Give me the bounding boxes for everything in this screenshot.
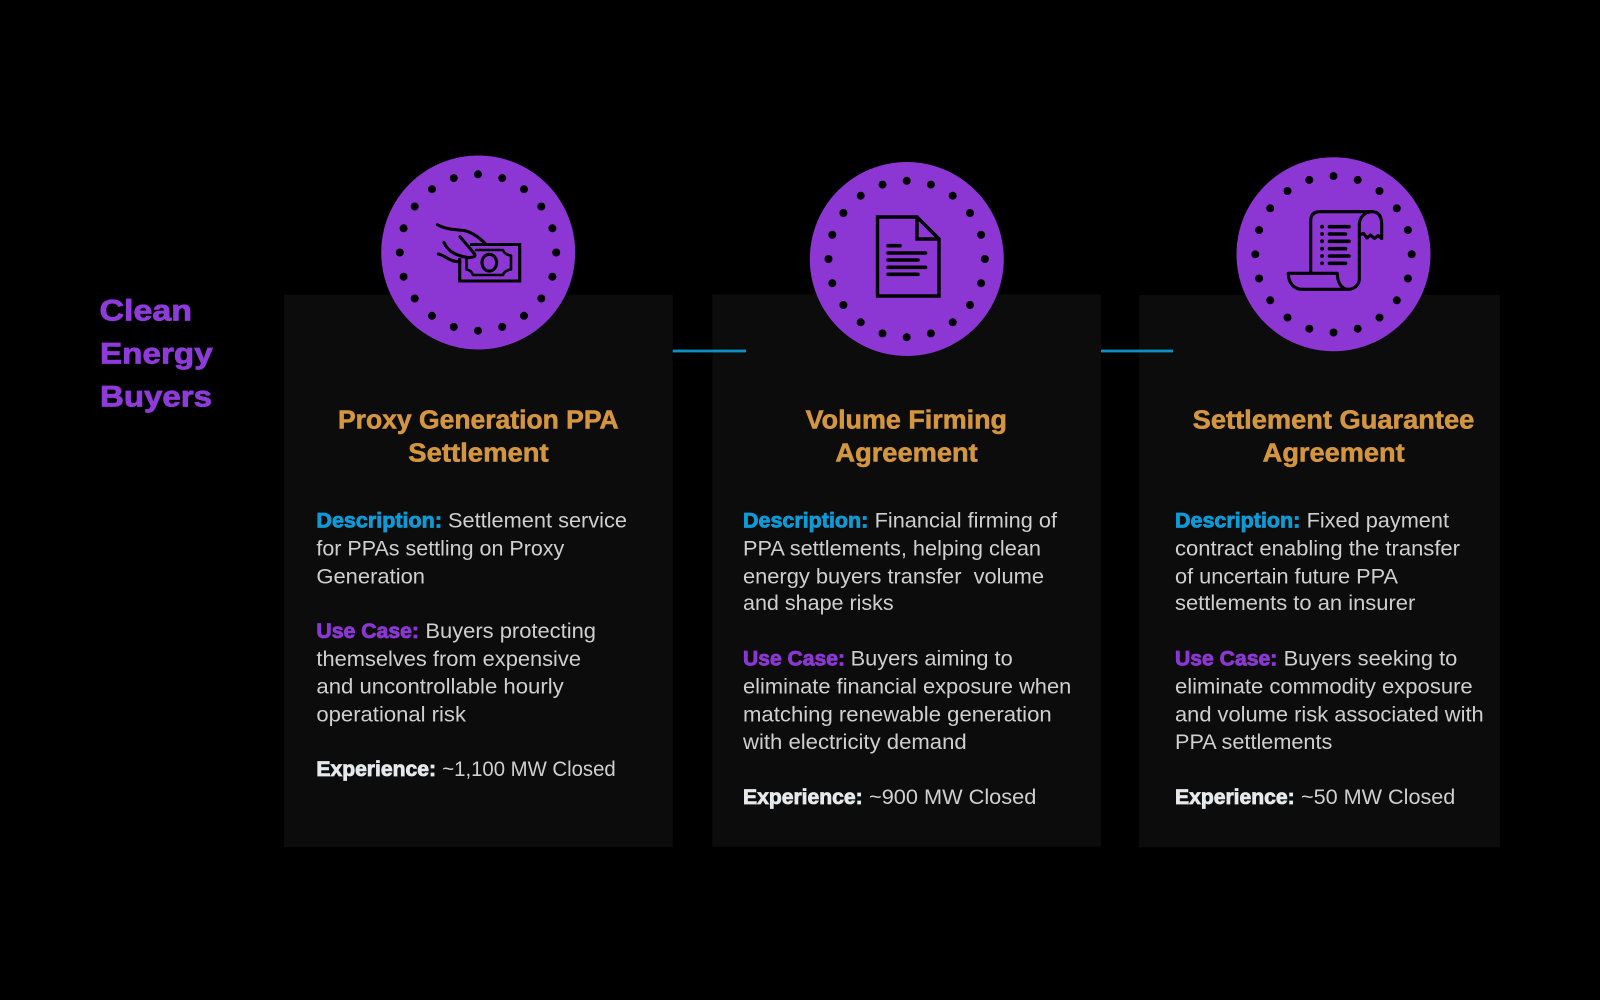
text block: description bbox=[743, 509, 1057, 615]
text block: description: Settlement service bbox=[448, 509, 627, 533]
heading: Volume Firming Agreement bbox=[806, 406, 1007, 468]
text block: experience: ~900 MW Closed bbox=[869, 785, 1036, 809]
text block: description: energy buyers transfer volume bbox=[743, 564, 1044, 588]
text block: description: Financial firming of bbox=[875, 509, 1057, 533]
text block: description bbox=[316, 509, 627, 588]
text block: experience: ~50 MW Closed bbox=[1301, 785, 1455, 809]
heading: Settlement Guarantee Agreement: Settlement Guarantee bbox=[1193, 406, 1474, 434]
text block: use case: eliminate financial exposure when bbox=[743, 675, 1071, 699]
heading: Volume Firming Agreement: Volume Firming bbox=[806, 406, 1007, 434]
panel: Settlement Guarantee Agreement bbox=[1139, 295, 1500, 847]
text block: experience: Experience: bbox=[1175, 785, 1295, 809]
panel: Volume Firming Agreement bbox=[712, 294, 1101, 847]
text block: description: settlements to an insurer bbox=[1175, 591, 1415, 615]
heading: Volume Firming Agreement: Agreement bbox=[835, 440, 978, 468]
text block: use case bbox=[316, 619, 596, 727]
text block: experience bbox=[743, 785, 1036, 809]
connector: panel 1 to panel 2 bbox=[673, 350, 746, 352]
text block: use case: Buyers protecting bbox=[425, 619, 596, 643]
text block: use case: themselves from expensive bbox=[316, 647, 581, 671]
icon: document bbox=[810, 162, 1004, 356]
connector: panel 2 to panel 3 bbox=[1101, 350, 1173, 352]
text block: use case: Buyers seeking to bbox=[1284, 647, 1457, 671]
text block: description: Fixed payment bbox=[1307, 509, 1449, 533]
heading: Proxy Generation PPA Settlement bbox=[338, 406, 619, 468]
text block: description: Description: bbox=[1175, 509, 1300, 533]
text block: use case: with electricity demand bbox=[742, 730, 967, 754]
text block: experience bbox=[316, 757, 616, 781]
text block: use case bbox=[742, 647, 1071, 754]
heading: Proxy Generation PPA Settlement: Settlement bbox=[408, 440, 549, 468]
text block: use case bbox=[1175, 647, 1484, 754]
text block: use case: and uncontrollable hourly bbox=[316, 675, 564, 699]
text block: description: PPA settlements, helping clean bbox=[743, 536, 1041, 560]
text block: experience: ~1,100 MW Closed bbox=[442, 757, 616, 781]
text block: description: of uncertain future PPA bbox=[1175, 564, 1399, 588]
icon: hand holding money bbox=[381, 156, 575, 350]
side heading: Clean Energy Buyers bbox=[100, 295, 213, 414]
heading: Settlement Guarantee Agreement: Agreement bbox=[1263, 440, 1405, 468]
text block: description: Description: bbox=[743, 509, 868, 533]
side heading: Clean Energy Buyers: Clean bbox=[100, 295, 192, 328]
text block: description: Description: bbox=[316, 509, 442, 533]
text block: use case: PPA settlements bbox=[1175, 730, 1332, 754]
text block: experience: Experience: bbox=[743, 785, 863, 809]
text block: use case: eliminate commodity exposure bbox=[1175, 675, 1473, 699]
heading: Settlement Guarantee Agreement bbox=[1193, 406, 1474, 468]
text block: description: for PPAs settling on Proxy bbox=[316, 536, 565, 560]
side heading: Clean Energy Buyers: Energy bbox=[100, 337, 213, 370]
icon: scroll receipt bbox=[1236, 157, 1430, 351]
text block: use case: and volume risk associated with bbox=[1175, 703, 1484, 727]
text block: use case: matching renewable generation bbox=[743, 703, 1052, 727]
text block: use case: Use Case: bbox=[743, 647, 845, 671]
text block: description: Generation bbox=[316, 564, 425, 588]
text block: description: and shape risks bbox=[743, 591, 894, 615]
text block: description: contract enabling the transfer bbox=[1175, 536, 1460, 560]
side heading: Clean Energy Buyers: Buyers bbox=[100, 381, 212, 414]
text block: use case: Buyers aiming to bbox=[851, 647, 1013, 671]
panel: Proxy Generation PPA Settlement bbox=[284, 295, 673, 847]
text block: use case: operational risk bbox=[316, 703, 466, 727]
heading: Proxy Generation PPA Settlement: Proxy Generation PPA bbox=[338, 406, 619, 434]
text block: use case: Use Case: bbox=[1175, 647, 1277, 671]
text block: use case: Use Case: bbox=[316, 619, 419, 643]
text block: description bbox=[1175, 509, 1460, 615]
text block: experience bbox=[1175, 785, 1455, 809]
text block: experience: Experience: bbox=[316, 757, 436, 781]
